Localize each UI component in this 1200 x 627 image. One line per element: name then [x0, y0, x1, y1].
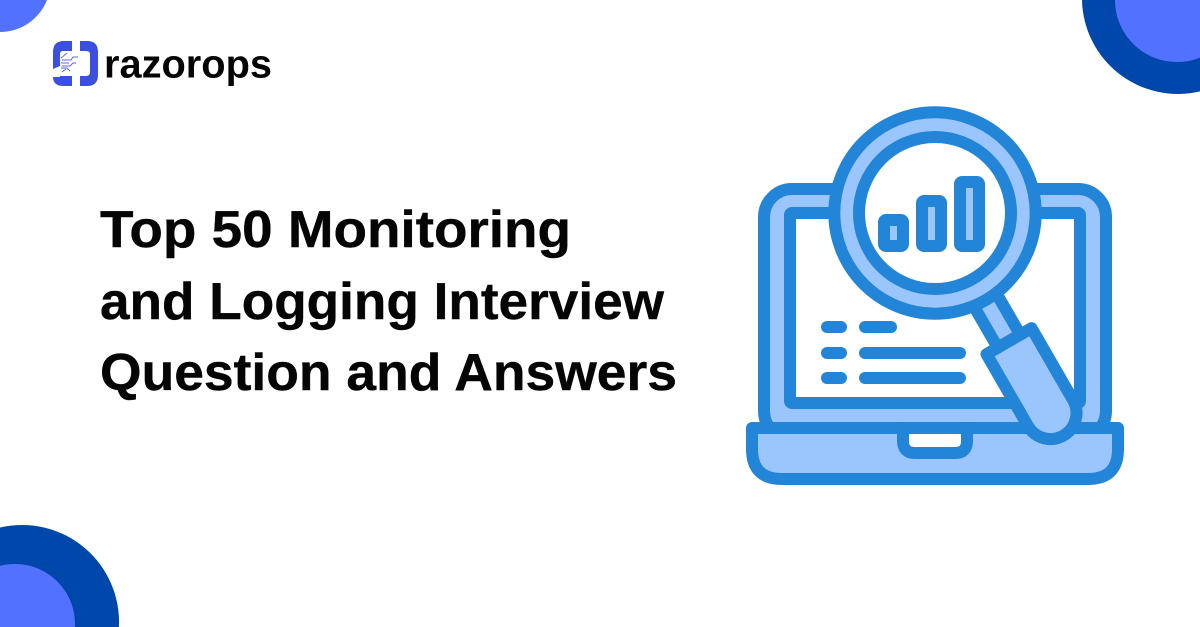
- laptop screen: [790, 213, 1080, 403]
- logo: razorops: [53, 41, 272, 86]
- corner decoration: bottom left: [0, 525, 119, 627]
- title: Question and Answers: [100, 344, 677, 402]
- title: and Logging Interview: [100, 273, 665, 331]
- laptop lid: [764, 189, 1106, 439]
- laptop notch: [903, 428, 967, 453]
- magnifying glass handle: [961, 285, 1086, 449]
- bar chart in lens: [884, 182, 979, 246]
- icon: logo brackets with circuit: [53, 41, 98, 86]
- laptop base: [752, 428, 1118, 479]
- corner decoration: top left: [0, 0, 47, 32]
- text list on screen: [821, 321, 966, 384]
- title: Top 50 Monitoring: [100, 201, 571, 259]
- icon: laptop with magnifying glass: [752, 112, 1118, 479]
- corner decoration: top right: [1082, 0, 1200, 94]
- logo wordmark: razorops: [104, 42, 272, 86]
- magnifying glass lens: [834, 112, 1036, 314]
- title: [100, 201, 677, 402]
